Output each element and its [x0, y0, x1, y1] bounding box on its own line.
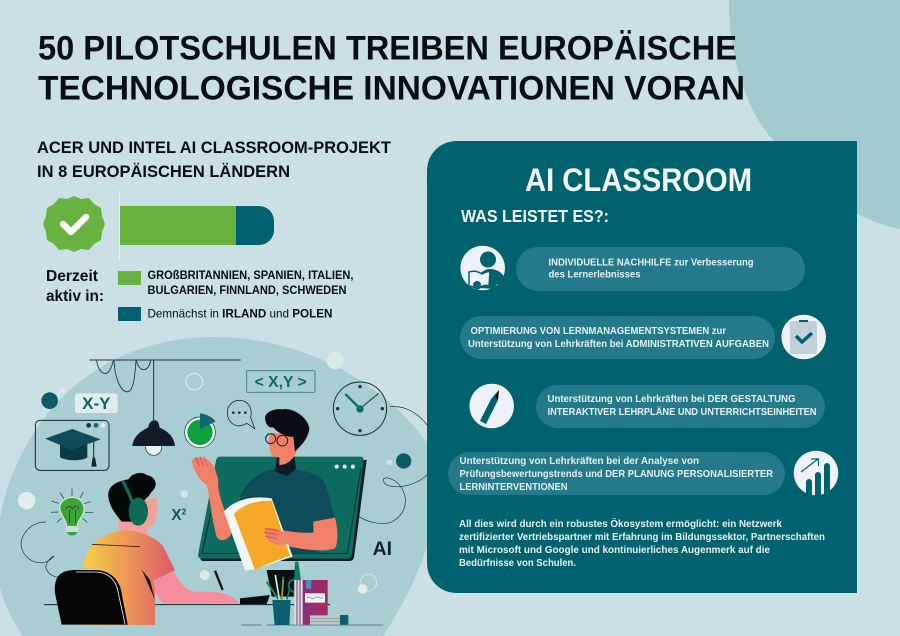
teacher [192, 409, 337, 597]
item 4: analysis: Prüfungsbewertungstrends und DER PLANUNG PERSONALISIERTER [460, 469, 774, 480]
item 4: analysis: LERNINTERVENTIONEN [460, 482, 568, 493]
item 2: learning management: Unterstützung von Lehrkräften bei ADMINISTRATIVEN AUFGABEN [468, 339, 769, 350]
title: TECHNOLOGISCHE INNOVATIONEN VORAN [38, 70, 745, 108]
formula: X-Y [75, 393, 118, 413]
screen with graduation cap [35, 420, 109, 470]
background blob [0, 337, 436, 636]
formula: X,Y: < X,Y > [255, 374, 307, 391]
item 1: tutoring: des Lernerlebnisses [548, 270, 641, 281]
label: X squared: 2 [182, 507, 187, 517]
item 4: analysis: Unterstützung von Lehrkräften bei der Analyse von [460, 456, 699, 467]
progress bar [119, 190, 274, 260]
decorative curves [21, 406, 428, 577]
icon: clipboard [781, 315, 826, 359]
green chart [185, 413, 216, 448]
closing paragraph: Bedürfnisse von Schulen. [459, 558, 576, 569]
subtitle: ACER UND INTEL AI CLASSROOM-PROJEKT [37, 138, 392, 157]
light bulb [51, 489, 93, 535]
subtitle [37, 138, 392, 181]
student [44, 473, 330, 625]
clock [333, 382, 387, 435]
label: AI: AI [373, 539, 392, 560]
legend: GROßBRITANNIEN, SPANIEN, ITALIEN, [148, 268, 354, 282]
icon: pencil [469, 384, 514, 428]
subtitle: IN 8 EUROPÄISCHEN LÄNDERN [37, 162, 290, 181]
title: 50 PILOTSCHULEN TREIBEN EUROPÄISCHE [38, 30, 737, 68]
icon: growth chart [794, 451, 838, 496]
legend: Demnächst in IRLAND und POLEN [148, 306, 332, 320]
icon: tutor [460, 246, 505, 290]
item 1: tutoring: INDIVIDUELLE NACHHILFE zur Verbesserung [548, 258, 754, 268]
closing paragraph: mit Microsoft und Google und kontinuierliches Augenmerk auf die [459, 545, 770, 556]
decorative dots [18, 352, 411, 594]
item 3: curriculum design [469, 384, 825, 428]
icon: green check badge [43, 196, 105, 252]
legend: BULGARIEN, FINNLAND, SCHWEDEN [148, 283, 346, 297]
desk items [242, 575, 383, 625]
item 2: learning management [460, 315, 826, 359]
closing paragraph: All dies wird durch ein robustes Ökosystem ermöglicht: ein Netzwerk [459, 517, 782, 530]
decorative corner shape [729, 0, 900, 229]
title [38, 30, 745, 108]
label: Derzeit aktiv in: aktiv in: [46, 288, 104, 305]
closing paragraph [459, 517, 825, 569]
panel: AI Classroom [427, 141, 857, 593]
book [224, 497, 293, 571]
formula: X,Y [247, 371, 315, 392]
closing paragraph: zertifizierter Vertriebspartner mit Erfahrung im Bildungssektor, Partnerschaften [459, 532, 825, 543]
item 3: curriculum design: Unterstützung von Lehrkräften bei DER GESTALTUNG [548, 394, 796, 405]
teacher tablet [198, 457, 367, 561]
item 3: curriculum design: INTERAKTIVER LEHRPLÄNE UND UNTERRICHTSEINHEITEN [548, 405, 816, 418]
panel subheading: WAS LEISTET ES?: [461, 206, 609, 226]
panel heading: AI CLASSROOM [525, 162, 752, 198]
ceiling lamp and wires [89, 360, 241, 455]
label: Derzeit aktiv in: Derzeit [46, 268, 99, 285]
speech bubble [227, 400, 255, 429]
label: Derzeit aktiv in [46, 268, 104, 305]
label: X squared: X [171, 507, 182, 524]
formula: X-Y: X-Y [82, 394, 111, 413]
legend [118, 268, 354, 321]
item 4: analysis [448, 451, 838, 496]
illustration: classroom [0, 337, 436, 636]
item 1: tutoring [460, 246, 805, 291]
item 2: learning management: OPTIMIERUNG VON LERNMANAGEMENTSYSTEMEN zur [470, 326, 726, 337]
